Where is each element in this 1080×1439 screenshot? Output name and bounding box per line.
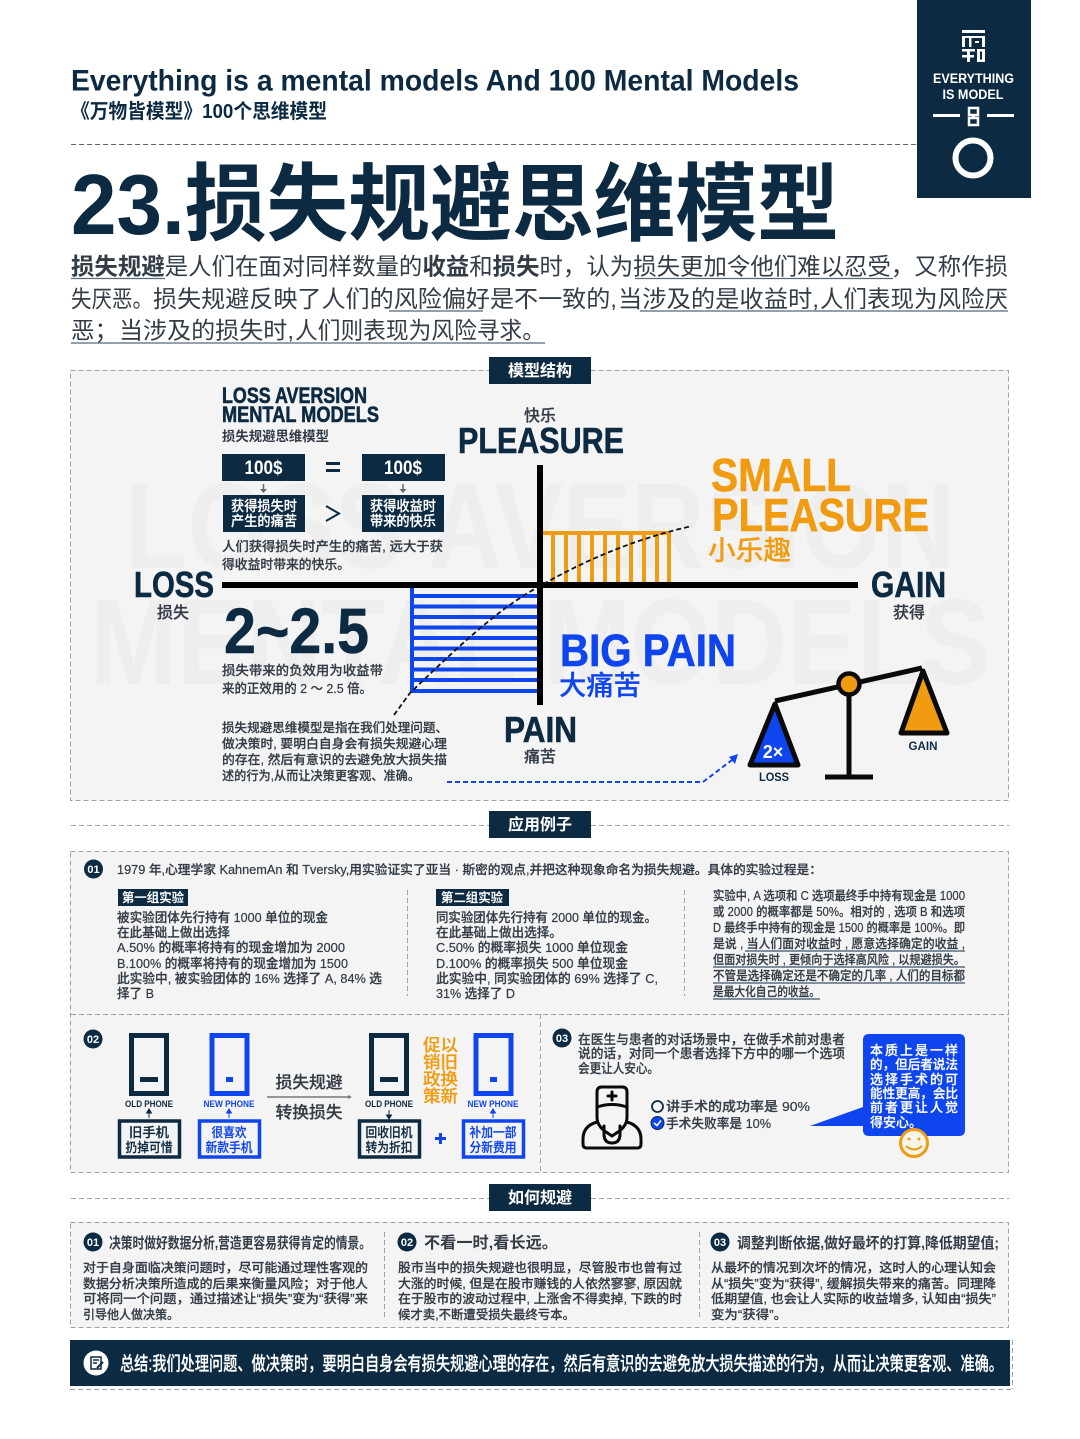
label: small pleasure: 小乐趣 [708,536,791,566]
example 1: 同实验团体先行持有 2000 单位的现金。 [436,910,657,925]
description text [222,720,448,783]
icon: smiley [900,1130,928,1156]
tip 2: 02 [401,1237,413,1249]
axis label: gain: GAIN [871,564,946,605]
label: small pleasure: SMALL [711,449,851,501]
example 2: phones [84,1030,524,1157]
axis label: gain [871,564,946,622]
example 1: 01 [87,864,100,876]
note: pain outweighs pleasure: 得收益时带来的快乐。 [222,557,350,572]
axis label: gain: 获得 [893,604,925,622]
intro paragraph: 损失规避反映了人们的风险偏好是不一致的, [153,286,617,312]
comparison: 100 dollars pain vs pleasure [222,454,445,532]
chart: value curve dashed [394,526,692,715]
example 1: 1979 年,心理学家 KahnemAn 和 Tversky,用实验证实了亚当 · 斯密的观点,并把这种现象命名为损失规避。具体的实验过程是： [117,862,822,877]
tip 1: 决策时做好数据分析,营造更容易获得肯定的情景。 [109,1234,371,1252]
chart: axes [222,465,858,705]
example 3: doctor [552,1028,965,1156]
header title english: Everything is a mental models And 100 Mental Models [71,64,799,98]
axis label: pain: PAIN [504,709,577,750]
label: trade-in promotion: 促以 [423,1036,458,1055]
icon: new phone top-up [464,1036,524,1157]
plus sign [435,1133,446,1144]
icon: balance scale: 2× [763,742,783,762]
example 3: doctor: 在医生与患者的对话场景中，在做手术前对患者 [578,1032,845,1047]
heading: loss aversion mental models: LOSS AVERSION [222,383,367,408]
icon: doctor [583,1087,641,1148]
stat: 2 to 2.5 times: 2~2.5 [224,595,369,667]
label: trade-in promotion: 政换 [423,1070,458,1089]
brand logo tab: IS MODEL [942,87,1004,102]
options list: 讲手术的成功率是 90% [666,1099,810,1114]
example 1: 不管是选择确定还是不确定的几率 , 人们的目标都 [713,968,965,983]
heading: loss aversion mental models: MENTAL MODELS [222,402,379,427]
tip 2: 候才卖,不断遭受损失最终亏本。 [398,1307,575,1322]
label: small pleasure [708,449,929,566]
badge: model structure: 模型结构 [508,362,572,380]
icon: note [84,1350,108,1376]
heading: loss aversion mental models: 损失规避思维模型 [222,428,329,444]
icon: old phone: 旧手机 [129,1125,169,1140]
icon: new phone: NEW PHONE [204,1099,254,1109]
tip 2: 大涨的时候, 但是在股市赚钱的人依然寥寥, 原因就 [398,1276,682,1291]
label: big pain: 大痛苦 [559,671,641,701]
intro paragraph: 人们则表现为风险寻求。 [295,318,545,344]
tip 3: 03 [714,1237,726,1249]
comparison: 100 dollars pain vs pleasure: 100$ [384,458,422,479]
description text: 的存在, 然后有意识的去避免放大损失描 [222,752,447,767]
summary bar [70,1340,1012,1390]
tip 3: 低期望值, 也会让人实际的收益增多, 认知由“损失” [711,1291,996,1306]
heading: loss aversion mental models [222,383,379,444]
axis label: pain: 痛苦 [524,747,556,766]
tip 3: 变为“获得”。 [711,1307,787,1322]
arrow: loss aversion conversion [267,1073,352,1122]
axis label: loss: 损失 [157,604,189,622]
axis label: pain [504,709,577,766]
axis label: loss: LOSS [134,564,214,605]
description text: 做决策时, 要明白自身会有损失规避心理 [222,736,448,751]
brand logo tab [917,0,1031,198]
icon: new phone top-up: 分新费用 [470,1140,516,1155]
example 1: 此实验中, 被实验团体的 16% 选择了 A, 84% 选 [117,971,382,986]
example 1: 在此基础上做出选择。 [436,925,562,940]
label: small pleasure: PLEASURE [712,489,929,541]
description text: 损失规避思维模型是指在我们处理问题、 [222,720,448,735]
comparison: 100 dollars pain vs pleasure: 带来的快乐 [370,513,436,529]
example 3: doctor: 03 [556,1033,568,1045]
example 1: 但面对损失时 , 更倾向于选择高风险 , 以规避损失。 [713,952,965,967]
tip 3: 调整判断依据,做好最坏的打算,降低期望值; [737,1234,999,1252]
brand logo tab: EVERYTHING [933,71,1014,86]
tip 2: 在于股市的波动过程中, 上涨舍不得卖掉, 下跌的时 [398,1291,682,1306]
chart: orange small pleasure bars [540,531,671,585]
tip 1: 对于自身面临决策问题时，尽可能通过理性客观的 [83,1260,368,1275]
note: pain outweighs pleasure: 人们获得损失时产生的痛苦, 远大于获 [222,539,443,554]
note: pain outweighs pleasure [222,539,443,572]
watermark text [90,458,990,710]
callout bubble: 本质上是一样 [870,1043,958,1058]
icon: old phone recycled [360,1036,420,1157]
icon: new phone [200,1036,260,1157]
tip 2: 股市当中的损失规避也很明显，尽管股市也曾有过 [398,1260,683,1275]
panel: how to avoid [70,1222,1008,1328]
example 1 [84,860,965,1001]
example 1: 择了 B [117,986,154,1001]
tip 3: 从“损失”变为“获得”, 缓解损失带来的痛苦。同理降 [711,1276,997,1291]
icon: balance scale: GAIN [908,739,938,753]
example 1: D.100% 的概率损失 500 单位现金 [436,956,628,971]
tip 1: 01 [87,1237,99,1249]
example 1: 是最大化自己的收益。 [713,984,820,999]
axis label: loss [134,564,214,622]
example 1: 被实验团体先行持有 1000 单位的现金 [117,910,328,925]
icon: new phone top-up: 补加一部 [470,1125,516,1140]
icon: new phone: 新款手机 [206,1140,252,1155]
tip 1 [83,1232,371,1322]
arrow: loss aversion conversion: 损失规避 [276,1073,343,1092]
label: trade-in promotion: 策新 [423,1087,458,1106]
header subtitle chinese: 《万物皆模型》100个思维模型 [71,100,327,123]
tip 2: 不看一时,看长远。 [424,1234,558,1252]
intro paragraph: 恶； [71,318,118,344]
icon: old phone: 扔掉可惜 [126,1140,172,1155]
axis label: pleasure [458,407,624,461]
comparison: 100 dollars pain vs pleasure: 100$ [244,458,283,479]
comparison: 100 dollars pain vs pleasure: 产生的痛苦 [231,513,297,529]
badge: model structure [489,357,591,384]
label: trade-in promotion [423,1036,458,1106]
example 1: 是说 , 当人们面对收益时 , 愿意选择确定的收益 , [713,936,965,951]
tip 3: 从最坏的情况到次坏的情况，这时人的心理认知会 [711,1260,997,1275]
intro paragraph [71,254,1008,344]
badge: examples: 应用例子 [508,815,572,834]
comparison: 100 dollars pain vs pleasure: 获得收益时 [370,498,436,514]
description text: 述的行为,从而让决策更客观、准确。 [222,768,420,783]
axis label: pleasure: PLEASURE [458,420,624,461]
example 1: C.50% 的概率损失 1000 单位现金 [436,940,628,955]
tip 3 [710,1232,999,1322]
comparison: 100 dollars pain vs pleasure: 获得损失时 [231,498,297,514]
panel: model structure [70,370,1008,800]
example 3: doctor: 会更让人安心。 [578,1061,659,1076]
panel: application examples [70,852,1009,1172]
intro paragraph: 当涉及的损失时, [119,318,294,344]
intro paragraph: 失厌恶。 [71,286,153,312]
chart: blue big pain bars [410,585,540,693]
callout bubble: 得安心。 [870,1115,922,1130]
tip 1: 数据分析决策所造成的后果来衡量风险；对于他人 [83,1276,369,1291]
callout bubble: 选择手术的可 [870,1072,958,1087]
icon: old phone recycled: 回收旧机 [366,1125,412,1140]
icon: new phone top-up: NEW PHONE [468,1099,518,1109]
arrow: dashed blue to scale [447,754,738,782]
example 1: A.50% 的概率将持有的现金增加为 2000 [117,940,345,955]
arrow: loss aversion conversion: 转换损失 [276,1103,343,1122]
badge: examples [489,811,591,838]
example 1: 31% 选择了 D [436,986,515,1001]
callout bubble: 的，但后者说法 [870,1057,958,1072]
example 1: 第一组实验 [122,890,184,905]
icon: old phone [120,1036,180,1157]
example 1: B.100% 的概率将持有的现金增加为 1500 [117,956,348,971]
tip 2 [398,1232,683,1322]
label: big pain [559,625,736,701]
intro paragraph: 损失规避是人们在面对同样数量的收益和损失时，认为损失更加令他们难以忍受，又称作损 [71,254,1008,280]
axis label: pleasure: 快乐 [524,407,556,425]
tip 1: 可将同一个问题，通过描述让“损失”变为“获得”来 [83,1291,369,1306]
example 1: 在此基础上做出选择 [117,925,230,940]
callout bubble [810,1034,965,1136]
badge: how to avoid: 如何规避 [508,1188,572,1207]
stat: 2 to 2.5 times: 损失带来的负效用为收益带 [222,663,383,678]
badge: how to avoid [489,1184,591,1211]
icon: balance scale [750,668,947,784]
label: trade-in promotion: 销旧 [423,1053,458,1072]
icon: balance scale: LOSS [759,770,789,784]
stat: 2 to 2.5 times [222,595,383,696]
main title: 23.损失规避思维模型 [71,158,839,253]
example 1: 第二组实验 [441,890,503,905]
icon: old phone: OLD PHONE [125,1099,173,1109]
example 3: doctor: 说的话，对同一个患者选择下方中的哪一个选项 [578,1046,845,1061]
example 1: 实验中, A 选项和 C 选项最终手中持有现金是 1000 [713,888,965,903]
icon: old phone recycled: 转为折扣 [366,1140,412,1155]
stat: 2 to 2.5 times: 来的正效用的 2 ～ 2.5 倍。 [222,681,372,696]
callout bubble: 前者更让人觉 [870,1100,958,1115]
example 2: phones: 02 [87,1034,99,1046]
tip 1: 引导他人做决策。 [83,1307,179,1322]
icon: old phone recycled: OLD PHONE [365,1099,413,1109]
example 1: D 最终手中持有的现金是 1500 的概率是 100%。即 [713,920,965,935]
icon: new phone: 很喜欢 [212,1125,246,1140]
label: big pain: BIG PAIN [560,625,736,676]
options list: 手术失败率是 10% [666,1116,771,1131]
callout bubble: 能性更高，会比 [870,1086,958,1101]
intro paragraph: 人们表现为风险厌 [820,286,1008,312]
example 1: 或 2000 的概率都是 50%。相对的 , 选项 B 和选项 [713,904,965,919]
intro paragraph: 当涉及的是收益时, [618,286,819,312]
options list [651,1099,810,1131]
example 1: 此实验中, 同实验团体的 69% 选择了 C, [436,971,658,986]
